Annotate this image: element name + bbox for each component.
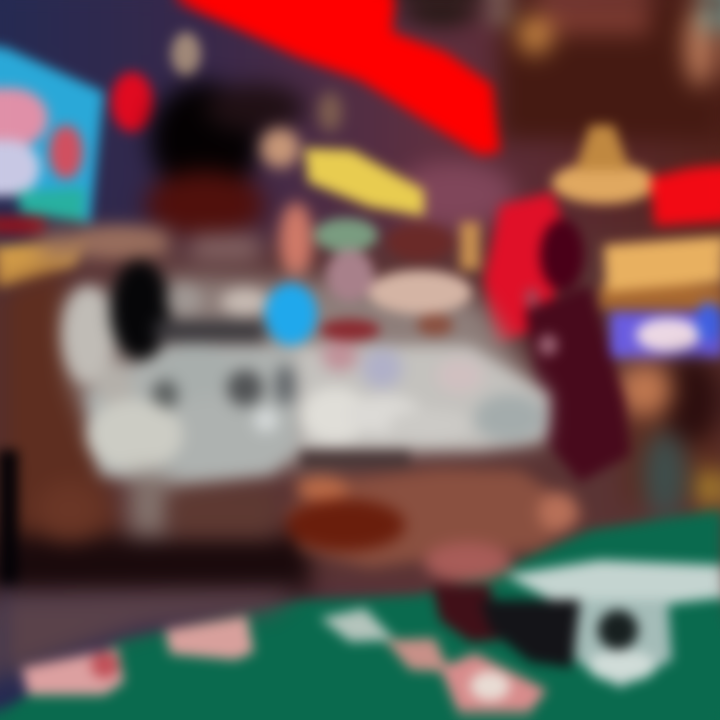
chip stack: far left (22, 648, 124, 695)
gold right band (604, 236, 720, 292)
person: red figure (484, 192, 570, 345)
lamp glow (171, 32, 201, 76)
brown left side (0, 270, 120, 550)
dark band under chips (300, 450, 410, 468)
upper table haze (40, 230, 260, 260)
teal sign (314, 218, 378, 252)
panel: red banner (172, 0, 500, 155)
gold chandelier (552, 125, 656, 204)
panel: left screen (0, 45, 104, 224)
white chips mass (61, 260, 550, 535)
lower left brown (170, 490, 275, 536)
chips base right (295, 345, 550, 450)
dark chip stack (432, 585, 580, 668)
mauve wall glow (395, 161, 515, 229)
black shadow bottom left (0, 450, 18, 585)
pink chip top (424, 542, 512, 582)
brown hand (285, 468, 585, 568)
person: face and arm (75, 92, 342, 278)
blue chip (265, 283, 317, 345)
chip stack: bottom centre (440, 653, 547, 712)
blue white lights (610, 302, 720, 358)
grey table edge (0, 590, 300, 680)
upper right brown room (398, 0, 720, 140)
white chips bottom right (505, 560, 720, 688)
lower dark floor (0, 535, 310, 593)
gold post behind figure (460, 222, 480, 270)
person: dark hair (145, 82, 305, 239)
chip stack: centre left (165, 616, 254, 660)
person: maroon figure (525, 219, 630, 482)
right brown zone (617, 356, 720, 519)
red sign (111, 72, 153, 132)
yellow band (305, 148, 424, 216)
red right awning (650, 165, 720, 226)
chips base left (85, 345, 300, 485)
chips shadow base (65, 275, 545, 490)
chip stack: centre (320, 608, 450, 672)
orange band under awning (600, 285, 720, 309)
gold band left (0, 216, 90, 288)
pink cards above chips (320, 223, 472, 341)
chips stem (130, 475, 170, 535)
green table (0, 510, 720, 720)
